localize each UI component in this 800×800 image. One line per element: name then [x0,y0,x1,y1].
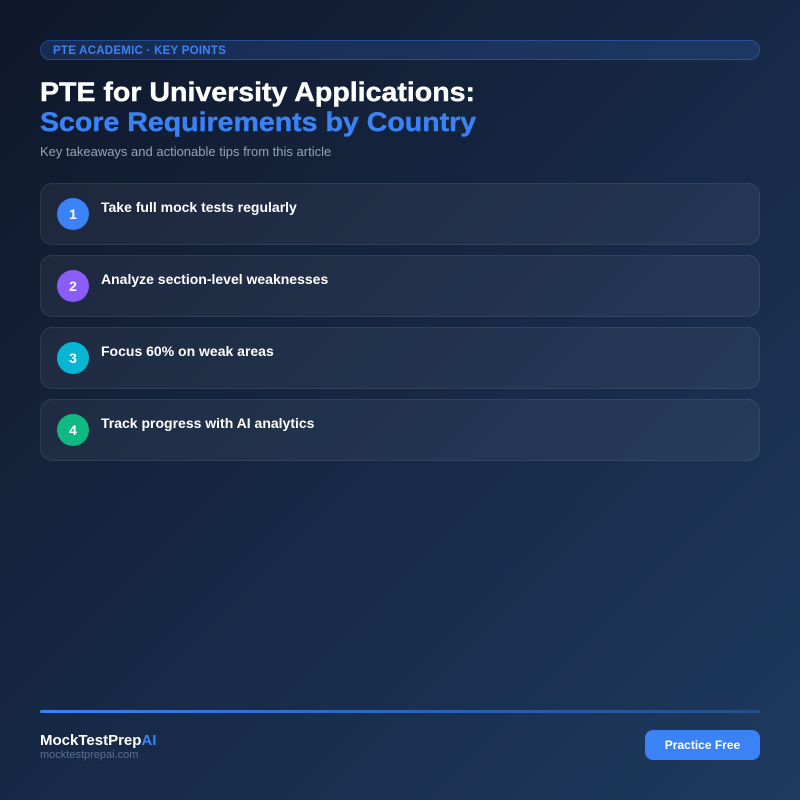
panel: key point 3: Focus 60% on weak areas [101,343,274,359]
panel: key point 4 [40,399,760,461]
title: Score Requirements by Country [40,107,476,137]
call to action button [645,730,760,760]
panel: key point 1: 1 [69,206,77,222]
panel: key point 2 [40,255,760,317]
panel: key point 1: Take full mock tests regularly [101,199,297,215]
panel: key point 2: Analyze section-level weaknesses [101,271,328,287]
panel: key point 4: 4 [69,422,77,438]
panel: key point 4: Track progress with AI analytics [101,415,314,431]
subtitle: Key takeaways and actionable tips from this article [40,144,331,159]
panel: key point 3: 3 [69,350,77,366]
title [40,77,476,137]
panel: key point 2: 2 [69,278,77,294]
badge: PTE Academic key points: PTE ACADEMIC · KEY POINTS [53,45,226,57]
brand name: MockTestPrepAI [40,732,156,749]
badge: PTE Academic key points [40,40,760,60]
brand website: mocktestprepai.com [40,749,138,761]
footer accent rule [40,710,760,713]
title: PTE for University Applications: [40,77,475,107]
panel: key point 3 [40,327,760,389]
panel: key point 1 [40,183,760,245]
call to action button: Practice Free [665,738,740,752]
